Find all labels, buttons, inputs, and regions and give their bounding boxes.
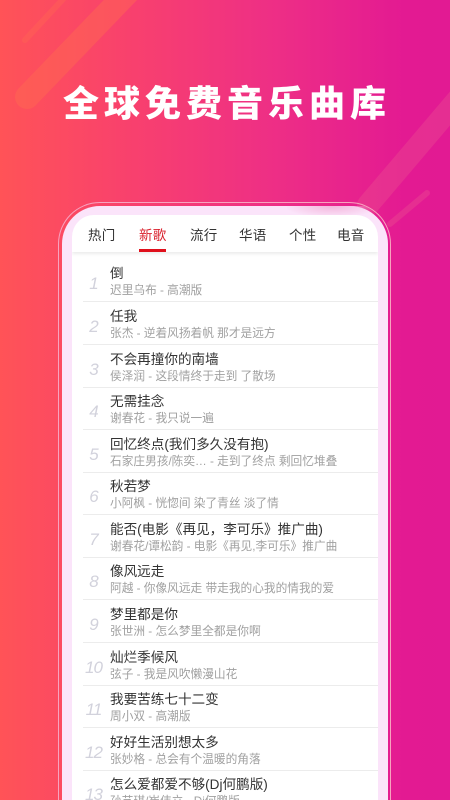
panel: song list card <box>72 215 378 800</box>
song 12: 好好生活别想太多 <box>110 735 219 750</box>
song 3: 3 <box>89 360 98 379</box>
song 11 <box>83 692 378 728</box>
song 10 <box>83 650 378 686</box>
panel: phone frame <box>58 202 391 800</box>
song 2: 任我 <box>110 309 137 324</box>
song 1 <box>83 266 378 302</box>
song 8: 像风远走 <box>110 564 164 579</box>
song 6: 小阿枫 - 恍惚间 染了青丝 淡了情 <box>110 497 279 510</box>
song 5: 回忆终点(我们多久没有抱) <box>110 437 269 452</box>
title: 全球免费音乐曲库 <box>63 83 391 124</box>
tab bar: 热门 <box>88 228 115 243</box>
tab bar: 新歌 <box>139 228 166 243</box>
song 7 <box>83 522 378 558</box>
song 8 <box>83 564 378 600</box>
song 1: 1 <box>89 274 98 293</box>
song 10: 弦子 - 我是风吹懒漫山花 <box>110 668 237 681</box>
tab bar: 电音 <box>337 228 364 243</box>
song 11: 周小双 - 高潮版 <box>110 710 191 723</box>
song 8: 阿越 - 你像风远走 带走我的心我的情我的爱 <box>110 582 334 595</box>
song 4 <box>83 394 378 430</box>
song 7: 7 <box>89 530 98 549</box>
song 9: 梦里都是你 <box>110 607 178 622</box>
song 7: 谢春花/谭松韵 - 电影《再见,李可乐》推广曲 <box>110 540 337 553</box>
song 9: 张世洲 - 怎么梦里全都是你啊 <box>110 625 261 638</box>
song 6: 秋若梦 <box>110 479 151 494</box>
song 2: 张杰 - 逆着风扬着帆 那才是远方 <box>110 327 276 340</box>
tab bar: 华语 <box>239 228 266 243</box>
tab bar <box>72 215 378 252</box>
tab bar: 流行 <box>190 228 217 243</box>
song 3: 侯泽润 - 这段情终于走到 了散场 <box>110 370 276 383</box>
song 13 <box>85 777 268 800</box>
song 5: 5 <box>89 445 98 464</box>
song 4: 谢春花 - 我只说一遍 <box>110 412 214 425</box>
song 2: 2 <box>89 317 98 336</box>
song 5 <box>83 437 378 473</box>
song 9 <box>83 607 378 643</box>
song 3: 不会再撞你的南墙 <box>110 352 219 367</box>
active tab underline <box>139 249 166 252</box>
song 8: 8 <box>89 572 98 591</box>
song 6: 6 <box>89 487 98 506</box>
song 11: 11 <box>86 700 101 719</box>
song 12: 张妙格 - 总会有个温暖的角落 <box>110 753 261 766</box>
song 5: 石家庄男孩/陈奕… - 走到了终点 剩回忆堆叠 <box>110 455 337 468</box>
song 6 <box>83 479 378 515</box>
song 10: 10 <box>85 658 102 677</box>
song 9: 9 <box>89 615 98 634</box>
song 12: 12 <box>85 743 102 762</box>
song 12 <box>83 735 378 771</box>
song 1: 倒 <box>110 266 124 281</box>
song 7: 能否(电影《再见，李可乐》推广曲) <box>110 522 323 537</box>
song 2 <box>83 309 378 345</box>
song 4: 4 <box>89 402 98 421</box>
song 3 <box>83 352 378 388</box>
song 4: 无需挂念 <box>110 394 164 409</box>
song 10: 灿烂季候风 <box>110 650 178 665</box>
song 11: 我要苦练七十二变 <box>110 692 219 707</box>
song 13: 怎么爱都爱不够(Dj何鹏版) <box>110 777 268 792</box>
song 1: 迟里乌布 - 高潮版 <box>110 284 202 297</box>
tab bar: 个性 <box>289 228 316 243</box>
